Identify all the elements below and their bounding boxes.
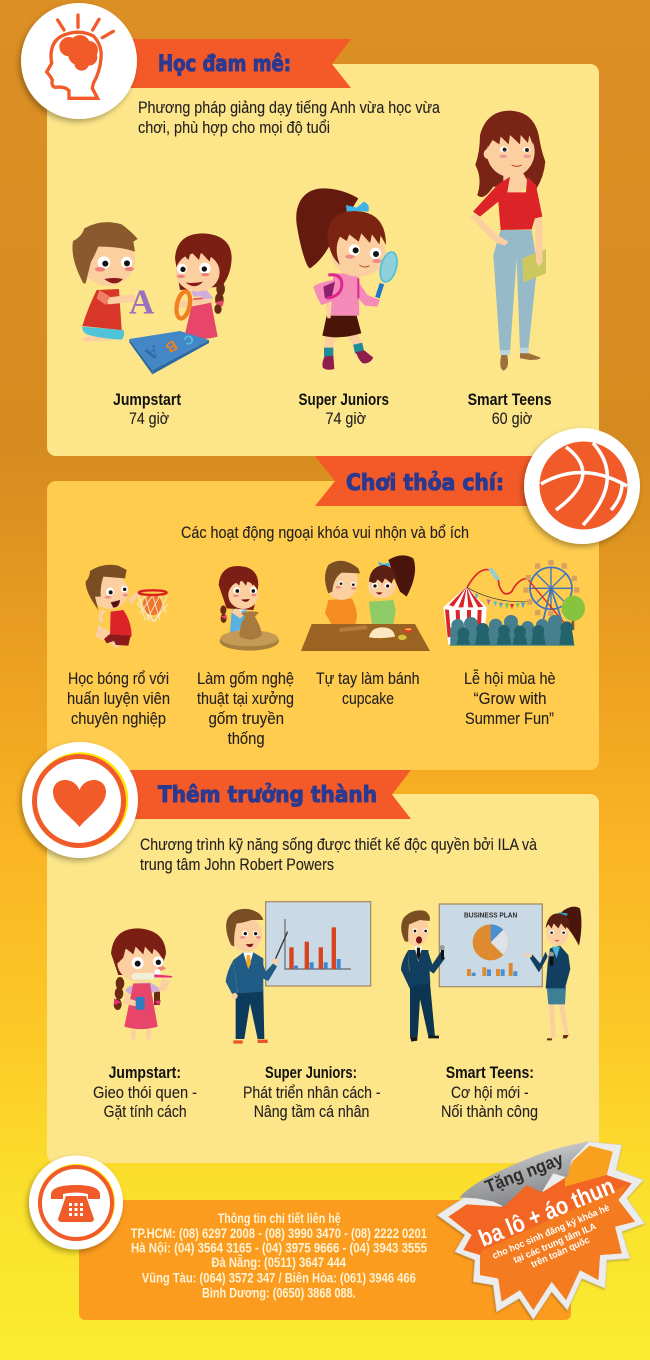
caption: học bóng rổ: chuyên nghiệp — [71, 709, 166, 728]
label: super juniors goal: Nâng tầm cá nhân — [254, 1102, 369, 1121]
panel: học đam mê — [21, 3, 599, 456]
contact text: Hà Nội: (04) 3564 3165 - (04) 3975 9666 - (04) 3943 3555 — [131, 1240, 427, 1256]
caption: lễ hội mùa hè: “Grow with — [474, 689, 546, 708]
intro text — [138, 98, 440, 137]
label: jumpstart goal: Gieo thói quen - — [93, 1083, 197, 1102]
caption: lễ hội mùa hè: Lễ hội mùa hè — [464, 669, 556, 688]
illustration: pottery girl — [219, 566, 279, 651]
icon: basketball — [524, 428, 640, 544]
illustration: jumpstart kids with letters — [72, 222, 232, 374]
label: jumpstart — [113, 390, 181, 428]
badge text: ba lô + áo thun: ba lô + áo thun — [475, 1173, 618, 1253]
label: smart teens goal: Nối thành công — [441, 1102, 538, 1121]
label: smart teens goal: Smart Teens: — [446, 1063, 534, 1082]
label: smart teens goal — [441, 1063, 538, 1121]
illustration: jumpstart kids with letters: A — [129, 283, 155, 322]
caption: làm gốm: Làm gốm nghệ — [197, 669, 294, 688]
badge: gift offer — [437, 1142, 644, 1319]
icon: brain head — [21, 3, 137, 119]
caption: làm bánh: Tự tay làm bánh — [316, 669, 420, 688]
label: smart teens: 60 giờ — [492, 409, 532, 428]
panel: chơi thỏa chí — [47, 428, 640, 770]
heading: chơi thỏa chí: Chơi thỏa chí: — [346, 471, 504, 496]
label: jumpstart goal — [93, 1063, 197, 1121]
icon: telephone — [29, 1156, 123, 1250]
caption: làm bánh: cupcake — [342, 689, 394, 708]
illustration: girl brushing teeth — [111, 928, 172, 1039]
label: super juniors: 74 giờ — [326, 409, 366, 428]
badge text: tặng ngay: Tặng ngay — [482, 1149, 566, 1197]
intro text — [140, 835, 537, 874]
banner: học đam mê — [125, 39, 351, 88]
contact text: Bình Dương: (0650) 3868 088. — [202, 1285, 356, 1301]
illustration: summer festival — [443, 560, 585, 646]
label: jumpstart: Jumpstart — [113, 390, 181, 409]
illustration: presenter with bar chart — [226, 902, 371, 1044]
contact text: Vũng Tàu: (064) 3572 347 / Biên Hòa: (061) 3946 466 — [142, 1270, 416, 1286]
icon: heart — [22, 742, 138, 858]
label: super juniors goal — [243, 1063, 381, 1121]
caption: làm bánh — [316, 669, 420, 708]
badge text: details: cho học sinh đăng ký khóa hè — [491, 1203, 611, 1262]
contact text — [131, 1210, 427, 1301]
banner: thêm trưởng thành — [125, 770, 411, 819]
caption: làm gốm — [197, 669, 294, 748]
caption: học bóng rổ: Học bóng rổ với — [68, 669, 169, 688]
label: super juniors goal: Super Juniors: — [265, 1063, 357, 1082]
badge text: details: trên toàn quốc — [529, 1235, 591, 1270]
label: super juniors — [298, 390, 389, 428]
intro text: chơi, phù hợp cho mọi độ tuổi — [138, 118, 330, 137]
panel: thêm trưởng thành — [22, 742, 599, 1163]
caption: học bóng rổ: huấn luyện viên — [67, 689, 170, 708]
intro text: Chương trình kỹ năng sống được thiết kế độc quyền bởi ILA và — [140, 835, 537, 854]
badge text: details: tại các trung tâm ILA — [512, 1221, 598, 1266]
banner: chơi thỏa chí — [315, 456, 560, 506]
contact box — [79, 1200, 571, 1320]
label: smart teens — [468, 390, 552, 428]
intro text: trung tâm John Robert Powers — [140, 855, 334, 874]
label: super juniors: Super Juniors — [298, 390, 389, 409]
illustration: jumpstart kids with letters: B — [162, 336, 180, 355]
label: jumpstart goal: Jumpstart: — [109, 1063, 181, 1082]
label: super juniors goal: Phát triển nhân cách - — [243, 1083, 381, 1102]
contact text: Thông tin chi tiết liên hệ — [218, 1210, 341, 1226]
caption: làm gốm: gốm truyền — [208, 709, 284, 728]
caption: lễ hội mùa hè — [464, 669, 556, 728]
illustration: super juniors girl with magnifier — [296, 188, 400, 370]
label: smart teens goal: Cơ hội mới - — [451, 1083, 529, 1102]
intro text: Các hoạt động ngoại khóa vui nhộn và bổ ích — [181, 523, 469, 542]
caption: làm gốm: thuật tại xưởng — [197, 689, 294, 708]
intro text: Phương pháp giảng dạy tiếng Anh vừa học vừa — [138, 98, 440, 117]
caption: làm gốm: thống — [228, 729, 265, 748]
caption: lễ hội mùa hè: Summer Fun” — [465, 709, 554, 728]
illustration: jumpstart kids with letters: C — [181, 331, 196, 348]
illustration: basketball boy — [86, 565, 167, 648]
label: jumpstart: 74 giờ — [129, 409, 169, 428]
illustration: man, woman and business plan board: BUSINESS PLAN — [464, 911, 518, 920]
heading: học đam mê: Học đam mê: — [158, 52, 291, 77]
illustration: smart teens girl — [470, 111, 546, 371]
label: smart teens: Smart Teens — [468, 390, 552, 409]
illustration: cupcake kids at table — [301, 555, 430, 651]
label: jumpstart goal: Gặt tính cách — [104, 1102, 187, 1121]
illustration: jumpstart kids with letters: A — [141, 341, 162, 364]
illustration: man, woman and business plan board — [401, 904, 581, 1042]
caption: học bóng rổ — [67, 669, 170, 728]
contact text: TP.HCM: (08) 6297 2008 - (08) 3990 3470 - (08) 2222 0201 — [131, 1225, 427, 1241]
contact text: Đà Nẵng: (0511) 3647 444 — [211, 1253, 346, 1270]
heading: thêm trưởng thành: Thêm trưởng thành — [158, 783, 377, 808]
